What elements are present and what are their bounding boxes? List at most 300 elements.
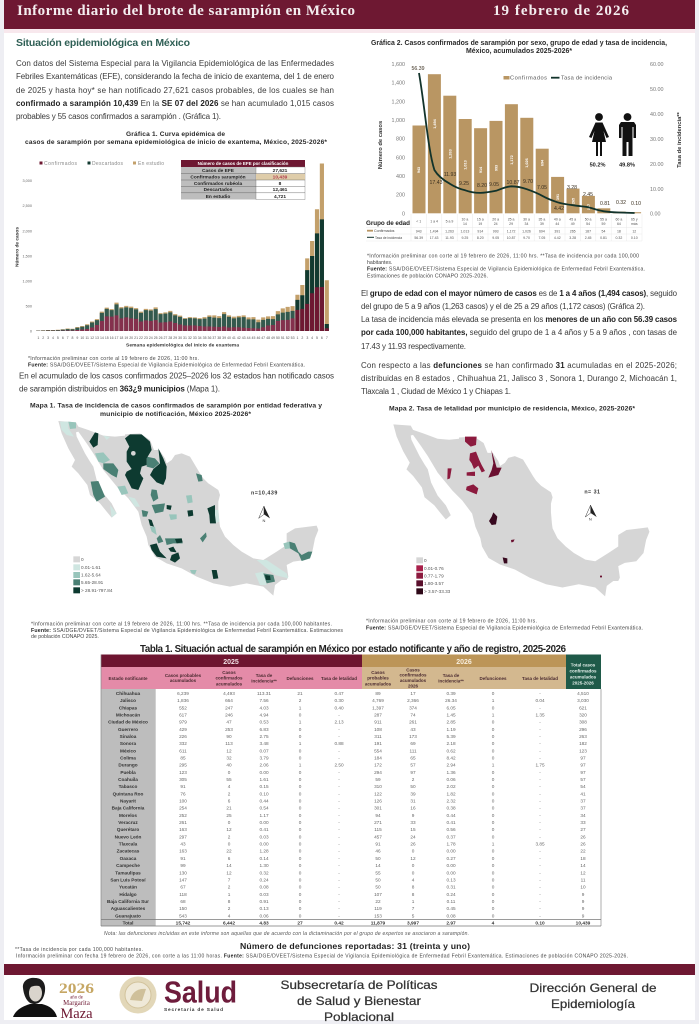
table values: 311 bbox=[374, 734, 382, 739]
sex percentages bbox=[590, 162, 635, 168]
chart 2 data table: 50 a bbox=[585, 218, 592, 222]
table: cases by classification: 27,621 bbox=[273, 168, 288, 174]
table state names: México bbox=[120, 748, 136, 753]
table values: 50 bbox=[375, 856, 381, 861]
chart 2 right axis: 0.00 bbox=[650, 211, 660, 217]
table values: 2,366 bbox=[407, 698, 419, 703]
chart 2 data table: 29 bbox=[509, 222, 513, 226]
table values: 0.47 bbox=[334, 691, 344, 696]
table state names: Coahuila bbox=[118, 777, 138, 782]
table values: 0.39 bbox=[446, 691, 456, 696]
table values: 0 bbox=[492, 756, 495, 760]
table values: 57 bbox=[410, 763, 416, 768]
chart 2 data table: 10.87 bbox=[507, 236, 516, 240]
map 2 notes: Fuente: SSA/DGE/DVEET/Sistema Especial de Vigilancia Epidemiológica de Enfermedad Febril Exantemática. bbox=[366, 626, 643, 632]
table values: 9 bbox=[582, 892, 585, 897]
table values: 9 bbox=[582, 913, 585, 918]
table: cases by classification: Confirmados rubéola bbox=[194, 181, 242, 187]
table values: 0.54 bbox=[259, 806, 269, 811]
map 1 mid municipalities bbox=[91, 457, 312, 583]
chart 2 data table: 25 a bbox=[508, 218, 515, 222]
table values: - bbox=[338, 892, 340, 897]
table values: - bbox=[338, 748, 340, 753]
table values: - bbox=[338, 777, 340, 782]
table values: - bbox=[338, 842, 340, 847]
table state names: Nayarit bbox=[120, 799, 136, 804]
table values: 34 bbox=[580, 813, 586, 818]
table values: - bbox=[539, 820, 541, 825]
map 1 legend bbox=[73, 556, 113, 593]
intro paragraph bbox=[16, 59, 335, 121]
table state names: Chiapas bbox=[119, 705, 138, 710]
map 1 country outline bbox=[58, 421, 318, 596]
table column headers: Defunciones bbox=[286, 676, 314, 681]
table values: 0 bbox=[492, 727, 495, 732]
table values: 24 bbox=[410, 834, 416, 839]
intro paragraph: de 2025 y hasta hoy* se han notificado 27,621 casos probables, de los cuales se han bbox=[16, 86, 334, 95]
table values: 429 bbox=[179, 727, 187, 732]
table values: - bbox=[539, 856, 541, 861]
portrait: Margarita Maza bbox=[13, 978, 57, 1017]
map 1 title bbox=[30, 402, 322, 418]
table values: 26.34 bbox=[445, 698, 457, 703]
table values: 2.02 bbox=[446, 784, 456, 789]
chart 2 data table: más bbox=[631, 222, 638, 226]
table values: 0 bbox=[299, 813, 302, 818]
chart 1 x axis labels: 1 bbox=[37, 336, 39, 340]
table values: 294 bbox=[374, 770, 382, 775]
table values: 130 bbox=[179, 870, 187, 875]
chart 2 right axis title: Tasa de incidencia** bbox=[677, 111, 683, 168]
table values: 611 bbox=[179, 748, 187, 753]
chart 2 data table: 14 bbox=[463, 222, 467, 226]
table values: 2.85 bbox=[446, 720, 456, 725]
chart 2 data table: 7.05 bbox=[538, 236, 545, 240]
table column headers: Tasa de bbox=[256, 673, 273, 678]
Salud logotype: Salud bbox=[164, 974, 237, 1010]
map 2 north arrow: N bbox=[589, 517, 592, 522]
table values: 253 bbox=[225, 727, 233, 732]
table state names: Puebla bbox=[120, 770, 136, 775]
map 1 notes: de población CONAPO 2025. bbox=[31, 634, 99, 640]
table values: - bbox=[539, 913, 541, 918]
chart 1 x axis labels: 5 bbox=[316, 336, 318, 340]
table values: 10 bbox=[580, 885, 586, 890]
table values: 332 bbox=[179, 741, 187, 746]
table column headers: 2026 bbox=[408, 684, 419, 688]
table values: 4 bbox=[412, 877, 415, 882]
map 1 notes: Fuente: SSA/DGE/DVEET/Sistema Especial de Vigilancia Epidemiológica de Enfermedad Febril Exantemática. Estimaciones bbox=[31, 628, 343, 634]
chart 1 x axis labels: 22 bbox=[139, 336, 143, 340]
table values: 621 bbox=[579, 705, 587, 710]
table: cases by classification: Casos de EFE bbox=[202, 168, 235, 174]
chart 2 data table: 187 bbox=[585, 229, 591, 233]
table values: 0 bbox=[492, 863, 495, 868]
chart 1 x axis labels: 8 bbox=[72, 336, 74, 340]
table footnotes: **Tasa de incidencia por cada 100,000 habitantes. bbox=[15, 947, 143, 953]
map 1 north arrow: N bbox=[263, 518, 266, 523]
chart 1 x axis labels: 31 bbox=[183, 336, 187, 340]
map 1 legend: > 28.91-797.84 bbox=[81, 588, 113, 593]
table values: 0 bbox=[492, 748, 495, 753]
chart 2 bar values: 1,013 bbox=[464, 160, 468, 170]
table column headers bbox=[108, 662, 597, 688]
table values: 32 bbox=[226, 756, 232, 760]
chart 2 left axis: 1,200 bbox=[392, 99, 405, 105]
table values: 12 bbox=[226, 748, 232, 753]
table state names: Guerrero bbox=[118, 727, 138, 732]
chart 2 rate labels: 8.20 bbox=[477, 183, 487, 189]
table values: 6 bbox=[228, 856, 231, 861]
chart 2 bar values: 1,026 bbox=[525, 158, 529, 168]
table values: 123 bbox=[179, 770, 187, 775]
table values: - bbox=[338, 770, 340, 775]
chart 2 data table: 1,494 bbox=[430, 229, 439, 233]
table values: 184 bbox=[374, 756, 382, 760]
table: cases by classification: Confirmados sarampión bbox=[190, 174, 246, 180]
chart 1 x axis labels: 4 bbox=[52, 336, 54, 340]
chart 1 legend bbox=[40, 161, 164, 167]
table: cases by classification: 8 bbox=[279, 181, 282, 187]
table: cases by classification: Descartados bbox=[204, 187, 233, 193]
table values: 0 bbox=[299, 770, 302, 775]
chart 1 x axis labels: 27 bbox=[163, 336, 167, 340]
table totals: 4 bbox=[492, 920, 495, 926]
map 2 notes bbox=[366, 618, 643, 632]
table values: 0 bbox=[228, 770, 231, 775]
table values: 172 bbox=[374, 763, 382, 768]
table footnotes bbox=[15, 947, 628, 960]
footer: undersecretariat bbox=[280, 978, 438, 1024]
chart 1 x axis title: Semana epidemiológica del inicio de exantema bbox=[126, 342, 239, 348]
chart 2 data table bbox=[366, 214, 642, 241]
table values: 4 bbox=[228, 784, 231, 789]
table values: 14 bbox=[226, 863, 232, 868]
table values: 107 bbox=[374, 892, 382, 897]
table values: 0.44 bbox=[446, 813, 456, 818]
table values: - bbox=[338, 820, 340, 825]
chart 2 data table: 49 bbox=[571, 222, 575, 226]
chart 1 x axis labels: 19 bbox=[124, 336, 128, 340]
table values: 0 bbox=[492, 899, 495, 904]
chart 1 x axis labels: 2 bbox=[42, 336, 44, 340]
table values: 0 bbox=[299, 712, 302, 718]
table totals: 6,442 bbox=[223, 920, 235, 926]
chart 2 bars bbox=[412, 74, 641, 213]
chart 2 data table: 9.70 bbox=[523, 236, 530, 240]
table title: Tabla 1. Situación actual de sarampión en México por estado notificante y año de registro, 2025-2026 bbox=[140, 644, 567, 655]
table values: 0 bbox=[299, 834, 302, 839]
municipalities paragraph: de sarampión distribuidos en 363¿9 municipios (Mapa 1). bbox=[19, 384, 220, 394]
table values: - bbox=[539, 885, 541, 890]
icon: man bbox=[619, 113, 636, 156]
chart 2 data table: 55 a bbox=[600, 218, 607, 222]
table values: 254 bbox=[179, 806, 187, 811]
table values: 1 bbox=[299, 720, 302, 725]
table: cases by classification: En estudio bbox=[206, 194, 230, 200]
table values: 0.13 bbox=[259, 906, 269, 911]
chart 1 notes bbox=[28, 356, 305, 368]
chart 2 data table: 694 bbox=[539, 229, 545, 233]
chart 2 data table: 0.10 bbox=[631, 236, 638, 240]
table values: 1.75 bbox=[535, 763, 545, 768]
table values: - bbox=[539, 727, 541, 732]
table values: 0.24 bbox=[446, 892, 456, 897]
chart 1 x axis labels: 11 bbox=[85, 336, 89, 340]
chart 2 data table: 44 bbox=[555, 222, 559, 226]
age group and deaths paragraphs: El grupo de edad con el mayor número de casos es de 1 a 4 años (1,494 casos), seguido bbox=[361, 289, 678, 298]
municipalities paragraph: En el acumulado de los casos confirmados 2025–2026 los 32 estados han notificado casos bbox=[19, 372, 334, 380]
chart 2 right axis bbox=[650, 62, 664, 217]
table values: - bbox=[338, 791, 340, 796]
chart 1 y axis: 1,500 bbox=[22, 254, 32, 258]
table values: 21 bbox=[226, 806, 232, 811]
table values: 0 bbox=[228, 842, 231, 847]
table values: 0 bbox=[299, 791, 302, 796]
chart 1 y axis: 0 bbox=[30, 330, 32, 334]
map 2 sample size: n= 31 bbox=[584, 490, 600, 496]
table values: - bbox=[338, 813, 340, 818]
table values: 65 bbox=[410, 756, 416, 760]
table values: 14 bbox=[375, 863, 381, 868]
table footnotes: Información preliminar con fecha 19 febrero de 2026, con corte a las 11:00 horas. Fuente: SSA/DGE/DVEET/Sistema Especial de Vigilancia Epidemiológica de Enfermedad Febril Exantemática. Estimaciones de población CONAPO 2025-2026. bbox=[16, 954, 628, 960]
table values: 2.75 bbox=[259, 734, 269, 739]
table state column bbox=[101, 689, 156, 926]
chart 1 y axis: 500 bbox=[26, 304, 32, 308]
chart 2 data table: 993 bbox=[493, 229, 499, 233]
table values: 0.32 bbox=[259, 870, 269, 875]
table values: 664 bbox=[225, 698, 233, 703]
table state names: Veracruz bbox=[118, 820, 138, 825]
table: cases by classification: Número de casos de EFE por clasificación bbox=[198, 161, 289, 166]
table values: 8.42 bbox=[446, 756, 456, 760]
chart 2 data table: 45 a bbox=[569, 218, 576, 222]
section heading: Situación epidemiológica en México bbox=[16, 37, 190, 49]
chart 1 legend: Confirmados bbox=[44, 161, 78, 167]
table values: 0.00 bbox=[446, 870, 456, 875]
table values: - bbox=[539, 748, 541, 753]
table state names: Total bbox=[123, 920, 133, 926]
table values: 0.07 bbox=[259, 748, 269, 753]
map 1 dark municipalities bbox=[89, 432, 271, 580]
chart 2 data table: 34 bbox=[525, 222, 528, 226]
table values: 55 bbox=[226, 777, 232, 782]
table values: 9 bbox=[412, 813, 415, 818]
table values: 0 bbox=[492, 834, 495, 839]
table values: 6.05 bbox=[446, 705, 456, 710]
chart 1 x axis labels: 41 bbox=[232, 336, 236, 340]
chart 2 rate labels: 0.10 bbox=[631, 201, 641, 207]
table values: - bbox=[338, 870, 340, 875]
chart 2 bar values: 1,494 bbox=[433, 118, 437, 129]
chart 2 bar values: 187 bbox=[587, 204, 591, 210]
table values: 99 bbox=[180, 863, 186, 868]
table values: 0 bbox=[492, 777, 495, 782]
map 1 title: municipio de notificación, México 2025-2026* bbox=[100, 411, 251, 418]
chart 2 left axis: 400 bbox=[396, 174, 405, 180]
sex percentages: 49.8% bbox=[619, 162, 635, 168]
table values: 0 bbox=[299, 913, 302, 918]
chart 2 notes: Fuente: SSA/DGE/DVEET/Sistema Especial de Vigilancia Epidemiológica de Enfermedad Febril Exantemática. bbox=[367, 266, 645, 272]
table values: 0 bbox=[299, 799, 302, 804]
chart 2 data table: 1 a 4 bbox=[430, 220, 438, 224]
table values: 0.15 bbox=[259, 784, 269, 789]
map 1 notes bbox=[31, 622, 343, 640]
map 1 mid-light municipalities bbox=[68, 422, 291, 574]
chart 1 bars bbox=[36, 164, 329, 331]
chart 2 rate labels: 2.45 bbox=[583, 192, 593, 198]
chart 2 title bbox=[371, 40, 667, 55]
chart 2 bar values bbox=[417, 118, 591, 210]
map 2 north arrow bbox=[585, 505, 597, 522]
table state names: Oaxaca bbox=[120, 856, 137, 861]
map 1 legend: 5.65-28.91 bbox=[81, 580, 104, 585]
chart 1 x axis labels: 13 bbox=[95, 336, 99, 340]
table values: 18 bbox=[580, 856, 586, 861]
table column headers: Defunciones bbox=[479, 676, 507, 681]
chart 1 x axis labels: 46 bbox=[256, 336, 260, 340]
table values: 320 bbox=[579, 712, 587, 718]
table column headers: acumulados bbox=[570, 674, 597, 680]
table values: 50 bbox=[375, 885, 381, 890]
table values: 22 bbox=[226, 849, 232, 854]
chart 2 left axis: 800 bbox=[396, 137, 405, 143]
table values: - bbox=[539, 899, 541, 904]
table values: 2.32 bbox=[446, 799, 456, 804]
chart 2: cases and incidence by age group bbox=[366, 62, 683, 241]
map 2 title: Mapa 2. Tasa de letalidad por municipio de residencia, México, 2025-2026* bbox=[389, 406, 635, 412]
table values: - bbox=[338, 863, 340, 868]
table values: 113 bbox=[225, 741, 233, 746]
table column headers: Casos bbox=[406, 668, 420, 672]
map 1 legend: 0 bbox=[81, 557, 84, 562]
table state names: Aguascalientes bbox=[111, 906, 146, 911]
table values: 295 bbox=[179, 763, 187, 768]
map 2 notes: *Información preliminar con corte al 19 febrero de 2026, 11:00 hrs. bbox=[366, 618, 537, 624]
table values: 57 bbox=[580, 777, 586, 782]
chart 2 data table: 54 bbox=[586, 222, 590, 226]
table column headers: Total casos bbox=[571, 662, 596, 668]
table values: 41 bbox=[580, 791, 586, 796]
table totals: 2.97 bbox=[446, 920, 456, 926]
table values: - bbox=[338, 885, 340, 890]
table values: 0 bbox=[492, 906, 495, 911]
table values: 0 bbox=[299, 870, 302, 875]
table values: 0.08 bbox=[446, 913, 456, 918]
table values: - bbox=[539, 806, 541, 811]
intro paragraph: probables y 55 casos confirmados a sarampión . (Gráfica 1). bbox=[16, 112, 221, 121]
table values: 0.38 bbox=[446, 806, 456, 811]
chart 1 x axis labels: 9 bbox=[76, 336, 78, 340]
chart 1 x axis labels: 6 bbox=[62, 336, 64, 340]
map 2: lethality choropleth bbox=[393, 424, 649, 596]
table values: 0 bbox=[492, 856, 495, 861]
chart 2 data table: 9.25 bbox=[461, 236, 468, 240]
chart 2 bar values: 914 bbox=[479, 166, 483, 173]
map 2 affected municipalities bbox=[447, 437, 485, 494]
table values: 374 bbox=[409, 705, 417, 710]
table state names: Zacatecas bbox=[117, 849, 140, 854]
table values: - bbox=[338, 712, 340, 718]
table values: 91 bbox=[180, 856, 186, 861]
table state names: Sonora bbox=[120, 741, 136, 746]
footer logos bbox=[13, 974, 237, 1022]
chart 1 x axis labels: 39 bbox=[222, 336, 226, 340]
chart 1 x axis labels: 29 bbox=[173, 336, 177, 340]
chart 1 x axis labels: 43 bbox=[242, 336, 246, 340]
table values: 7 bbox=[412, 906, 415, 911]
chart 1 x axis labels: 37 bbox=[212, 336, 216, 340]
chart 2 right axis: 40.00 bbox=[650, 112, 664, 118]
table state names: Campeche bbox=[116, 863, 140, 868]
chart 2 data table: 12 bbox=[632, 229, 636, 233]
chart 2 legend: Tasa de incidencia bbox=[561, 76, 613, 82]
table values: - bbox=[338, 827, 340, 832]
header banner: 19 febrero de 2026 bbox=[493, 3, 630, 19]
table state names: Sinaloa bbox=[120, 734, 137, 739]
table values: 0 bbox=[299, 727, 302, 732]
table totals: 0.42 bbox=[334, 920, 344, 926]
chart 1 title: casos de sarampión por semana epidemiológica de inicio de exantema, México, 2025-2026* bbox=[25, 139, 327, 146]
chart 2 data table: 64 bbox=[617, 222, 621, 226]
chart 2 data table: 11.93 bbox=[445, 236, 454, 240]
table state names: Baja California Sur bbox=[107, 899, 149, 904]
chart 2 rate labels: 3.28 bbox=[567, 185, 577, 191]
table values: 12 bbox=[226, 870, 232, 875]
chart 2 data table: 54 bbox=[602, 229, 605, 233]
chart 2 left axis: 200 bbox=[396, 193, 405, 199]
chart 1 x axis labels: 51 bbox=[281, 336, 285, 340]
chart 1 x axis labels: 20 bbox=[129, 336, 133, 340]
table values: 1 bbox=[299, 705, 302, 710]
table values: 0.13 bbox=[446, 877, 456, 882]
footer: undersecretariat: Subsecretaría de Políticas bbox=[280, 978, 438, 992]
table values: 1.82 bbox=[446, 791, 456, 796]
table column headers: Estado notificante bbox=[108, 676, 148, 681]
table values: 0.24 bbox=[259, 877, 269, 882]
table values: 0 bbox=[299, 784, 302, 789]
table state names: Guanajuato bbox=[115, 913, 141, 918]
table column headers: Casos bbox=[371, 670, 385, 675]
table values: 0.03 bbox=[259, 892, 269, 897]
chart 2 notes: *Información preliminar con corte al 19 febrero de 2026, 11:00 hrs. **Tasa de incidencia por cada 100,000 bbox=[367, 254, 639, 260]
table values: 0 bbox=[492, 885, 495, 890]
table values: 0 bbox=[299, 806, 302, 811]
chart 2 data table: 15 a bbox=[477, 218, 484, 222]
table values: 308 bbox=[579, 720, 587, 725]
table note: Nota: las defunciones incluidas en este informe son aquellas que de acuerdo con la dictaminación por el grupo de expertos se asociaron a sarampión. bbox=[104, 931, 469, 937]
table values: - bbox=[338, 734, 340, 739]
table values: - bbox=[539, 827, 541, 832]
chart 2 data table: 35 a bbox=[538, 218, 545, 222]
table values: - bbox=[539, 863, 541, 868]
table column headers: Casos probables bbox=[165, 673, 202, 678]
table values: - bbox=[338, 877, 340, 882]
table values: 1 bbox=[492, 842, 495, 847]
chart 1 x axis labels: 18 bbox=[119, 336, 123, 340]
table values: 0 bbox=[299, 820, 302, 825]
chart 1 x axis labels: 15 bbox=[105, 336, 109, 340]
table values: 4,493 bbox=[223, 691, 235, 696]
table values: - bbox=[539, 834, 541, 839]
table values: 46 bbox=[375, 849, 381, 854]
table values: 31 bbox=[410, 799, 416, 804]
table values: - bbox=[338, 849, 340, 854]
table state names: Nuevo León bbox=[115, 834, 142, 839]
table: cases by classification: 12,461 bbox=[273, 187, 288, 193]
table values: 163 bbox=[179, 849, 187, 854]
chart 1 x axis labels: 21 bbox=[134, 336, 138, 340]
